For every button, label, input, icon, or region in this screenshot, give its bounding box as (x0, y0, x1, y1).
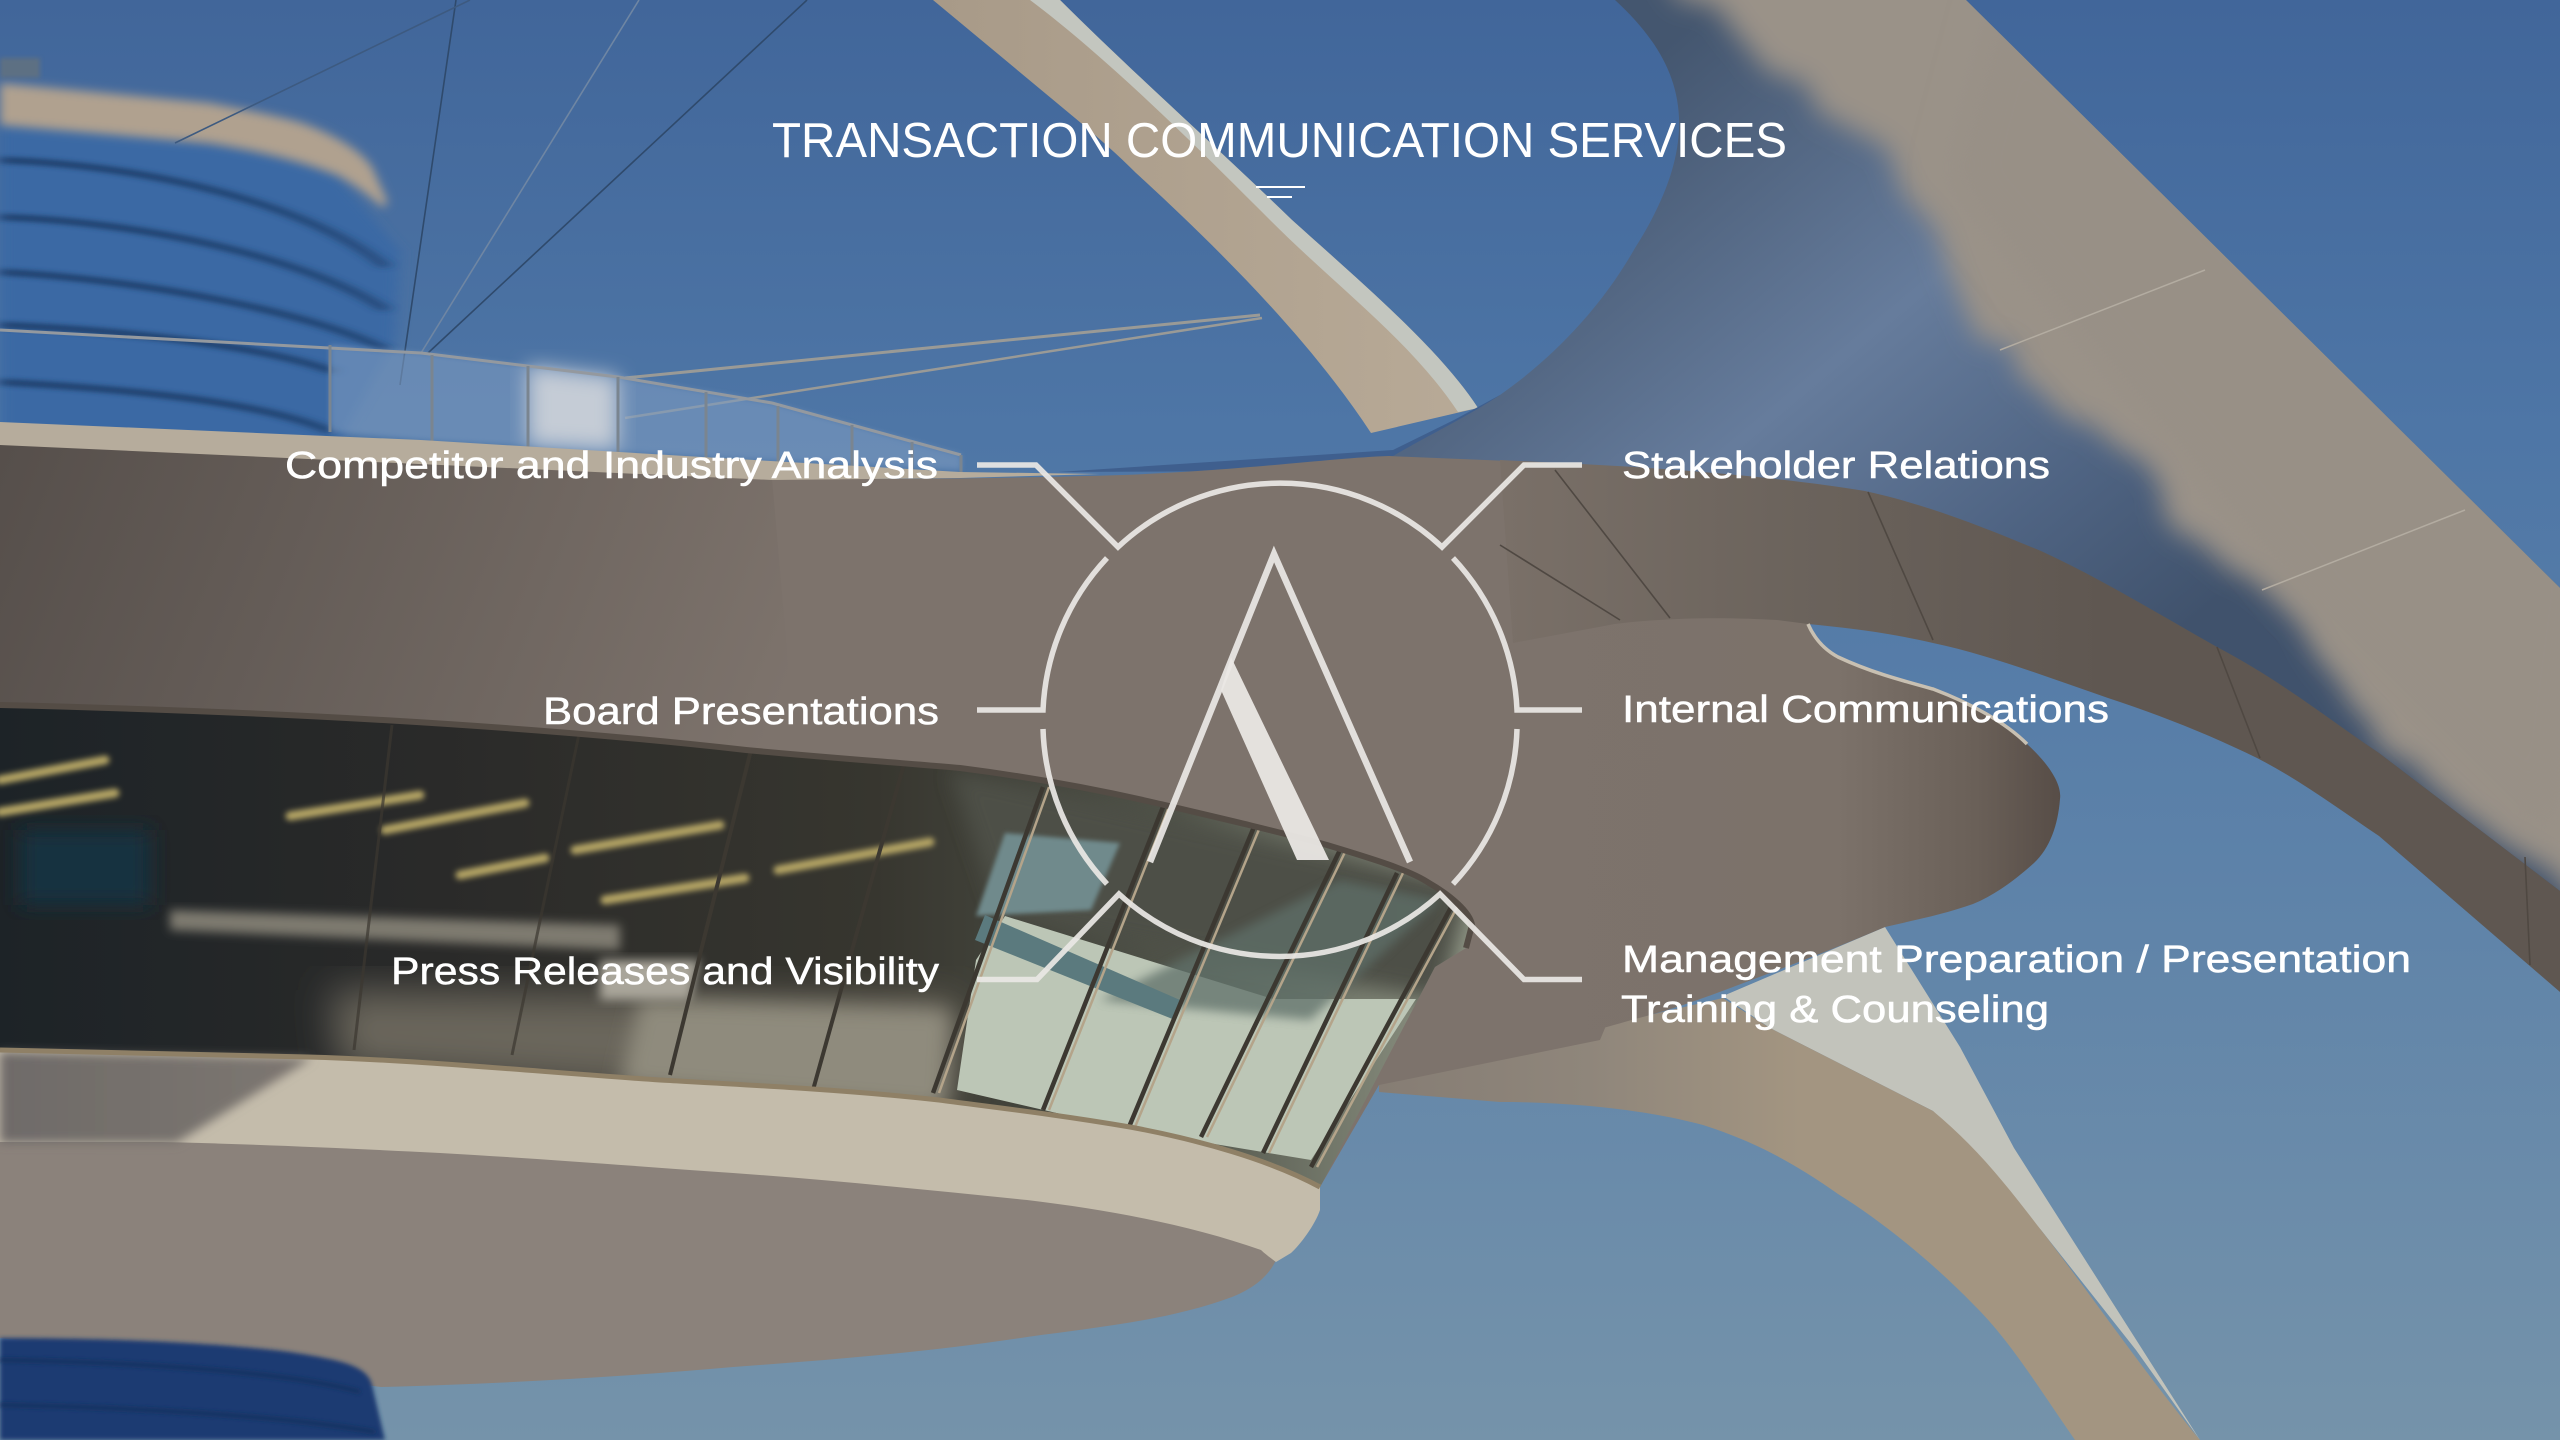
lower-right circle arc (1453, 729, 1517, 884)
saucer underside (0, 1100, 1290, 1387)
lower leg (1379, 998, 2200, 1440)
label: Internal Communications: Internal Communications (1622, 689, 2109, 731)
right arch: shaded underside (1393, 0, 2560, 900)
deck edge (0, 422, 1100, 480)
glass railing (0, 330, 961, 472)
saucer lit rim (0, 1050, 1320, 1262)
label: Management Preparation / Presentation Training & Counseling (1621, 939, 2411, 1031)
blue lower column (0, 1338, 385, 1440)
label: Management Preparation / Presentation Training & Counseling: Training & Counseling (1621, 989, 2049, 1031)
saucer nose (1300, 618, 2060, 1100)
right arch: sunlit band (1640, 0, 2560, 900)
title: TRANSACTION COMMUNICATION SERVICES (772, 114, 1787, 168)
blurred ceiling lights (0, 760, 930, 900)
shaded strip between hole and roof (1058, 395, 1500, 472)
title (772, 114, 1787, 198)
curved window (0, 690, 1500, 1200)
icon: logo A thick stroke (1221, 657, 1329, 860)
window top frame (0, 705, 1472, 948)
connector: top arc with Competitor and Stakeholder leaders (977, 465, 1582, 547)
label: Board Presentations: Board Presentations (543, 691, 939, 733)
rim frame (0, 1050, 1320, 1187)
connector: left arc with Board leader (977, 558, 1107, 710)
connector: bottom arc with Press and Management leaders (977, 894, 1582, 980)
icon: logo A outline (1150, 554, 1410, 862)
label: Competitor and Industry Analysis: Competitor and Industry Analysis (285, 445, 938, 487)
roof body (0, 440, 1700, 1187)
nose lip highlight (1808, 624, 2027, 744)
logo and connector lines (977, 465, 1582, 980)
arch band (1500, 460, 2560, 992)
tower behind the roof (0, 58, 400, 440)
rim shadow at left (0, 1052, 312, 1143)
support cables (175, 0, 1262, 418)
title decorative rule (1256, 186, 1305, 198)
label: Management Preparation / Presentation Training & Counseling: Management Preparation / Presentation (1622, 939, 2411, 981)
label: Stakeholder Relations: Stakeholder Relations (1622, 445, 2050, 487)
roof dark falloff at left (0, 440, 800, 800)
panel seams on the band (1500, 470, 2530, 965)
upper arch (933, 0, 1478, 433)
window mullions (354, 725, 1455, 1167)
lower-left circle arc (1043, 729, 1107, 884)
white wing of lower leg (1723, 927, 2200, 1440)
connector: right arc with Internal leader (1453, 558, 1582, 710)
label: Press Releases and Visibility: Press Releases and Visibility (391, 951, 939, 993)
